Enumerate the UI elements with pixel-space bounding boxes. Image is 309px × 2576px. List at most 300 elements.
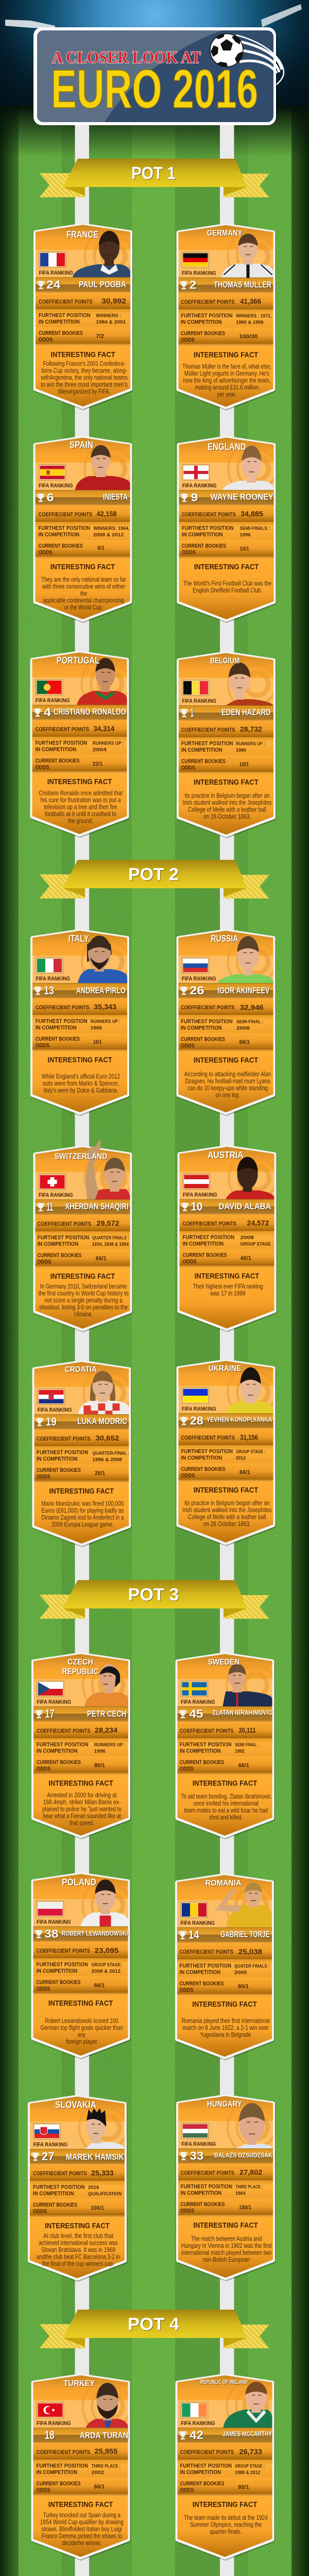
- FIFA ranking: 38: [44, 1927, 59, 1940]
- interesting fact: In Germany 2010, Switzerland became: [40, 1283, 127, 1290]
- interesting fact: [41, 1487, 124, 1528]
- interesting fact: INTERESTING FACT: [50, 563, 115, 571]
- player photo: Marek Hamsik: [85, 2108, 125, 2149]
- interesting fact: INTERESTING FACT: [48, 1779, 113, 1788]
- row: furthest position: 1964: [235, 2191, 246, 2196]
- row: bookies odds: CURRENT BOOKIES: [36, 2481, 80, 2487]
- FIFA ranking: 27: [42, 2150, 55, 2163]
- interesting fact: German top flight goals quicker than: [40, 2024, 123, 2031]
- row: bookies odds: ODDS: [35, 765, 49, 771]
- interesting fact: any: [78, 2031, 85, 2038]
- row: bookies odds: [181, 331, 258, 343]
- row: furthest position: RUNNERS UP :: [91, 1019, 121, 1025]
- country name: RUSSIA: [211, 934, 238, 944]
- interesting fact: decidethe winner.: [62, 2539, 101, 2547]
- row: coefficient points: COEFFIECIENT POINTS: [37, 1436, 90, 1442]
- row: furthest position: 2008 & 2012: [93, 532, 124, 538]
- player name: YEVHEN KONOPLYANKA: [207, 1416, 272, 1423]
- interesting fact: [40, 2500, 124, 2547]
- row: furthest position: 2016: [88, 2185, 99, 2191]
- row: bookies odds: CURRENT BOOKIES: [36, 1979, 80, 1986]
- country name: CZECH: [67, 1658, 93, 1667]
- flag: Germany: [182, 252, 209, 268]
- row: bookies odds: CURRENT BOOKIES: [181, 1037, 225, 1043]
- row: furthest position: FURTHEST POSITION: [181, 313, 233, 319]
- FIFA ranking: FIFA RANKING: [39, 483, 73, 489]
- row: coefficient points: COEFFIECIENT POINTS: [36, 2449, 90, 2455]
- row: bookies odds: 80/1: [238, 1984, 249, 1990]
- row: bookies odds: ODDS: [37, 1474, 50, 1480]
- panel: England: [177, 436, 286, 623]
- row: bookies odds: ODDS: [181, 337, 195, 343]
- panel: Sweden: [175, 1652, 284, 1839]
- player photo: Petr Cech: [84, 1664, 128, 1706]
- row: furthest position: 2008: [236, 1025, 250, 1031]
- player photo: Thomas Muller: [221, 234, 273, 277]
- player name: JAMES MCCARTHY: [222, 2430, 272, 2438]
- FIFA ranking: FIFA RANKING: [37, 2420, 71, 2427]
- posts: right sign post: [220, 124, 234, 2576]
- row: furthest position: IN COMPETITION: [37, 1748, 78, 1754]
- row: furthest position: GROUP STAGE :: [236, 1449, 266, 1455]
- interesting fact: making around £31.6 million: [195, 384, 259, 391]
- row: furthest position: 1992: [235, 1749, 245, 1754]
- row: coefficient points: 26,733: [239, 2448, 262, 2455]
- row: furthest position: [180, 1742, 259, 1754]
- interesting fact: [182, 778, 272, 820]
- row: furthest position: [35, 740, 124, 753]
- row: furthest position: FURTHEST POSITION: [39, 313, 91, 319]
- row: furthest position: [180, 2184, 263, 2196]
- row: coefficient points: [36, 2447, 118, 2455]
- row: furthest position: FURTHEST POSITION: [179, 1963, 231, 1969]
- row: bookies odds: 66/1: [94, 1982, 105, 1989]
- row: coefficient points: 32,946: [240, 1004, 264, 1011]
- row: bookies odds: [39, 330, 104, 343]
- interesting fact: straws. Blindfolded Italian boy Luigi: [42, 2526, 122, 2533]
- flag: Portugal: [36, 680, 63, 695]
- row: coefficient points: 29,572: [97, 1219, 119, 1227]
- row: furthest position: SEMI FINAL :: [235, 1742, 259, 1748]
- interesting fact: foreign player: [66, 2038, 97, 2045]
- player name: MAREK HAMSIK: [66, 2152, 125, 2162]
- FIFA ranking: FIFA RANKING: [33, 2142, 67, 2148]
- row: bookies odds: ODDS: [180, 2208, 195, 2214]
- interesting fact: shot and killed.: [209, 1814, 243, 1821]
- FIFA ranking: FIFA RANKING: [37, 1919, 71, 1925]
- row: bookies odds: ODDS: [37, 1766, 50, 1772]
- player name: BALÁZS DZSUDZSÁK: [214, 2151, 273, 2159]
- row: furthest position: [180, 2463, 265, 2476]
- row: coefficient points: COEFFIECIENT POINTS: [180, 2449, 234, 2455]
- row: bookies odds: 66/1: [96, 1256, 107, 1262]
- row: furthest position: IN COMPETITION: [33, 2191, 74, 2197]
- FIFA ranking: 33: [190, 2149, 203, 2162]
- interesting fact: or the World Cup.: [64, 604, 103, 611]
- row: bookies odds: [37, 1252, 107, 1265]
- row: bookies odds: ODDS: [182, 1259, 197, 1265]
- row: coefficient points: [182, 510, 264, 518]
- interesting fact: Its practice in Belgium began after an: [184, 1499, 270, 1506]
- FIFA ranking: [180, 976, 216, 997]
- row: furthest position: [37, 1235, 129, 1247]
- interesting fact: Arrested in 2000 for driving at: [47, 1792, 117, 1799]
- row: furthest position: THIRD PLACE :: [92, 2464, 121, 2469]
- player name: ANDREA PIRLO: [76, 986, 126, 995]
- row: bookies odds: CURRENT BOOKIES: [182, 1252, 227, 1258]
- flag: Slovakia: [33, 2124, 60, 2139]
- FIFA ranking: [34, 698, 70, 719]
- interesting fact: not score a single penalty during a: [45, 1297, 123, 1304]
- flag: England: [182, 465, 209, 480]
- row: coefficient points: 24,572: [247, 1219, 269, 1227]
- row: furthest position: RUNNERS UP :: [93, 741, 124, 747]
- row: coefficient points: 34,314: [94, 725, 115, 733]
- row: furthest position: FURTHEST POSITION: [37, 1742, 89, 1748]
- country name: FRANCE: [66, 230, 98, 240]
- player name: PETR CECH: [87, 1709, 127, 1719]
- row: furthest position: IN COMPETITION: [182, 1241, 224, 1247]
- country name: AUSTRIA: [208, 1150, 244, 1160]
- interesting fact: Robert Lewandowski scored 100: [45, 2018, 118, 2025]
- country name: SLOVAKIA: [55, 2100, 96, 2110]
- row: furthest position: QUALIFICATION: [88, 2191, 122, 2197]
- FIFA ranking: [37, 270, 73, 291]
- row: bookies odds: CURRENT BOOKIES: [37, 1467, 81, 1473]
- interesting fact: To aid team bonding, Zlatan Ibrahimovic: [181, 1793, 271, 1800]
- interesting fact: At club level, the first club that: [43, 2232, 113, 2240]
- row: coefficient points: 31,156: [240, 1433, 259, 1442]
- row: bookies odds: 10/1: [240, 546, 249, 552]
- interesting fact: on 26 October 1863.: [203, 813, 251, 820]
- row: furthest position: 1934, 1938 & 1954: [92, 1242, 129, 1247]
- row: coefficient points: [33, 2169, 114, 2177]
- row: furthest position: 1996 & 2008: [92, 1457, 122, 1463]
- row: coefficient points: COEFFIECIENT POINTS: [38, 512, 92, 518]
- row: furthest position: [179, 1963, 270, 1975]
- FIFA ranking: [34, 976, 70, 997]
- FIFA ranking: 26: [190, 984, 204, 997]
- interesting fact: INTERESTING FACT: [47, 1056, 112, 1064]
- row: coefficient points: 25,955: [95, 2447, 118, 2455]
- interesting fact: INTERESTING FACT: [48, 1999, 113, 2008]
- row: bookies odds: 80/1: [238, 2484, 249, 2490]
- row: furthest position: [181, 1449, 266, 1461]
- row: furthest position: QUARTER-FINAL :: [92, 1451, 129, 1456]
- row: furthest position: IN COMPETITION: [180, 1748, 221, 1754]
- row: furthest position: FURTHEST POSITION: [36, 1019, 88, 1025]
- interesting fact: [39, 1272, 129, 1318]
- player photo: David Alaba: [226, 1157, 274, 1199]
- interesting fact: per year.: [217, 391, 236, 398]
- title sign: [33, 27, 284, 125]
- country name: SWITZERLAND: [55, 1152, 108, 1161]
- interesting fact: [40, 1999, 123, 2045]
- interesting fact: INTERESTING FACT: [194, 350, 258, 360]
- FIFA ranking: [179, 1920, 215, 1941]
- interesting fact: [183, 563, 271, 594]
- row: furthest position: [36, 1019, 121, 1031]
- FIFA ranking: 24: [46, 278, 61, 291]
- row: furthest position: 2012: [236, 1455, 246, 1461]
- interesting fact: applicable continental championship: [43, 597, 125, 604]
- row: bookies odds: CURRENT BOOKIES: [182, 543, 226, 549]
- banner: Pot 1: POT 1: [131, 164, 176, 183]
- panel: France: [33, 223, 143, 410]
- row: coefficient points: COEFFIECIENT POINTS: [35, 726, 89, 733]
- player photo: Arda Turan: [85, 2383, 128, 2428]
- row: furthest position: IN COMPETITION: [181, 319, 222, 326]
- row: furthest position: 1980: [236, 748, 246, 753]
- FIFA ranking: [181, 1192, 217, 1213]
- interesting fact: INTERESTING FACT: [45, 2222, 110, 2230]
- row: furthest position: FURTHEST POSITION: [35, 740, 87, 747]
- row: bookies odds: [181, 1037, 250, 1049]
- row: bookies odds: ODDS: [180, 1766, 194, 1772]
- row: furthest position: IN COMPETITION: [38, 532, 79, 538]
- row: furthest position: [181, 313, 271, 326]
- flag: France: [39, 252, 66, 267]
- row: bookies odds: 66/1: [238, 1762, 249, 1769]
- banner: Pot 2: POT 2: [128, 865, 179, 884]
- row: coefficient points: COEFFIECIENT POINTS: [181, 727, 235, 733]
- player photo: Igor Akinfeev: [217, 936, 273, 983]
- row: furthest position: [39, 313, 126, 325]
- row: bookies odds: 150/1: [239, 2205, 251, 2211]
- row: coefficient points: [182, 1219, 269, 1227]
- interesting fact: Thomas Müller is the face of, what else,: [182, 363, 271, 370]
- interesting fact: the ground.: [68, 817, 93, 824]
- interesting fact: [184, 2500, 268, 2535]
- row: coefficient points: [38, 510, 117, 518]
- interesting fact: Italy's were by Dolce & Gabbana.: [43, 1087, 118, 1094]
- interesting fact: now the king of advertisingin the team,: [183, 377, 271, 384]
- interesting fact: [41, 563, 126, 611]
- row: bookies odds: CURRENT BOOKIES: [179, 1980, 224, 1987]
- row: furthest position: FURTHEST POSITION: [182, 526, 234, 532]
- FIFA ranking: [180, 483, 217, 504]
- panel: Spain: [33, 436, 142, 623]
- banner: Pot 2: [39, 860, 269, 899]
- row: coefficient points: [37, 1434, 119, 1442]
- row: furthest position: 1988 & 2012: [235, 2470, 260, 2476]
- player name: IGOR AKINFEEV: [217, 986, 270, 995]
- row: furthest position: [36, 2463, 121, 2476]
- row: furthest position: IN COMPETITION: [37, 1241, 78, 1247]
- country name: ENGLAND: [208, 442, 246, 452]
- row: coefficient points: COEFFIECIENT POINTS: [39, 299, 93, 305]
- row: bookies odds: 16/1: [93, 1039, 102, 1045]
- row: furthest position: FURTHEST POSITION: [181, 1449, 233, 1455]
- flag: Poland: [37, 1901, 64, 1917]
- interesting fact: College of Melle with a leather ball: [188, 806, 266, 813]
- row: furthest position: 1968: [91, 1025, 102, 1031]
- row: bookies odds: [37, 1759, 105, 1772]
- row: coefficient points: [36, 1003, 117, 1011]
- interesting fact: non-British European: [203, 2256, 250, 2263]
- panel: Italy: [30, 929, 140, 1116]
- heading: A closer look at: A CLOSER LOOK AT: [52, 48, 201, 67]
- row: coefficient points: 30,652: [95, 1434, 119, 1442]
- FIFA ranking: 17: [45, 1707, 55, 1720]
- icon: football: [210, 34, 243, 67]
- row: coefficient points: COEFFIECIENT POINTS: [36, 1948, 90, 1954]
- interesting fact: shootout, losing 3-0 on penalties to the: [39, 1303, 128, 1311]
- interesting fact: with three consecutive wins of either: [42, 583, 125, 590]
- row: coefficient points: 23,095: [95, 1946, 119, 1955]
- FIFA ranking: [37, 1192, 73, 1213]
- interesting fact: [182, 1486, 271, 1528]
- interesting fact: Slovan Bratislava. It was in 1969: [41, 2246, 115, 2253]
- row: furthest position: FURTHEST POSITION: [181, 1019, 233, 1025]
- interesting fact: Euros (£81,000) for playing badly as: [41, 1507, 124, 1514]
- row: bookies odds: ODDS: [36, 2487, 50, 2494]
- FIFA ranking: [37, 2420, 71, 2442]
- row: furthest position: IN COMPETITION: [180, 2190, 221, 2196]
- interesting fact: Yugoslavia in Belgrade: [200, 2031, 251, 2038]
- row: furthest position: [38, 526, 130, 538]
- interesting fact: [37, 2222, 120, 2267]
- interesting fact: INTERESTING FACT: [193, 1779, 257, 1788]
- banner: Pot 3: POT 3: [128, 1585, 179, 1604]
- player photo: Zlatan Ibrahimovic: [222, 1664, 272, 1706]
- row: coefficient points: COEFFIECIENT POINTS: [33, 2171, 87, 2177]
- row: bookies odds: 100/30: [239, 334, 258, 340]
- interesting fact: withArgentina, the only national teams: [41, 374, 128, 381]
- flag: Italy: [36, 958, 63, 973]
- interesting fact: [181, 1779, 271, 1821]
- interesting fact: 2009 Europa League game.: [52, 1521, 113, 1528]
- flag: Turkey: [37, 2402, 64, 2418]
- interesting fact: tions Cup victory, they became, along-: [41, 367, 127, 374]
- player name: LUKA MODRIC: [77, 1416, 127, 1426]
- row: furthest position: QUARTER FINALS :: [92, 1235, 129, 1241]
- country name: PORTUGAL: [57, 655, 99, 666]
- country name: REPUBLIC OF IRELAND: [200, 2379, 248, 2385]
- interesting fact: his cure for frustration was to put a: [41, 796, 121, 804]
- row: furthest position: [33, 2184, 122, 2197]
- interesting fact: team-mates to eat a wild boar he had: [184, 1807, 268, 1814]
- row: furthest position: GROUP STAGE: [240, 1242, 271, 1247]
- row: coefficient points: COEFFIECIENT POINTS: [37, 1221, 91, 1227]
- row: coefficient points: 35,343: [94, 1003, 117, 1011]
- row: bookies odds: CURRENT BOOKIES: [37, 1252, 81, 1259]
- FIFA ranking: 28: [190, 1414, 203, 1427]
- row: coefficient points: 25,038: [238, 1948, 263, 1956]
- player name: WAYNE ROONEY: [210, 492, 274, 502]
- player name: INIESTA: [103, 492, 128, 502]
- FIFA ranking: [179, 2420, 215, 2442]
- panel: Austria: [177, 1145, 286, 1332]
- panel: Republic of Ireland: [175, 2374, 284, 2561]
- FIFA ranking: 19: [46, 1415, 57, 1428]
- FIFA ranking: 13: [44, 984, 54, 997]
- interesting fact: Mario Mandzukic was fined 100,000: [41, 1500, 124, 1507]
- panel: Russia: [176, 929, 285, 1116]
- player name: CRISTIANO RONALDO: [54, 707, 126, 717]
- row: bookies odds: ODDS: [36, 1043, 49, 1049]
- row: furthest position: 1984 & 2001: [96, 319, 126, 325]
- panel: Romania: [175, 1873, 284, 2060]
- row: bookies odds: [181, 758, 249, 771]
- row: bookies odds: ODDS: [39, 337, 53, 343]
- row: furthest position: THIRD PLACE :: [235, 2184, 263, 2190]
- row: furthest position: [181, 1019, 264, 1031]
- interesting fact: achieved international success was: [39, 2239, 117, 2246]
- FIFA ranking: 2: [190, 278, 197, 292]
- interesting fact: on 26 October 1863.: [203, 1520, 251, 1528]
- row: coefficient points: [181, 1433, 259, 1442]
- row: furthest position: [36, 1962, 122, 1974]
- interesting fact: was 17 in 1999: [210, 1290, 246, 1297]
- interesting fact: They are the only national team so far: [41, 576, 126, 583]
- interesting fact: [42, 1056, 120, 1094]
- row: furthest position: WINNERS : 1972,: [236, 313, 271, 319]
- row: coefficient points: [181, 1004, 264, 1011]
- FIFA ranking: 6: [46, 491, 54, 504]
- row: coefficient points: COEFFIECIENT POINTS: [37, 1728, 91, 1734]
- row: furthest position: IN COMPETITION: [181, 1455, 222, 1461]
- row: furthest position: [182, 526, 270, 538]
- interesting fact: Ukraine.: [74, 1311, 93, 1318]
- row: coefficient points: 41,366: [240, 298, 262, 305]
- panel: Portugal: [30, 651, 139, 838]
- interesting fact: INTERESTING FACT: [49, 1487, 114, 1496]
- flag: Spain: [39, 465, 66, 480]
- row: furthest position: IN COMPETITION: [36, 2469, 77, 2476]
- row: furthest position: IN COMPETITION: [179, 1969, 220, 1975]
- country name: POLAND: [62, 1877, 96, 1888]
- flag: Croatia: [38, 1389, 64, 1404]
- row: furthest position: FURTHEST POSITION: [180, 1742, 232, 1748]
- row: furthest position: QUATER FINALS :: [234, 1963, 270, 1969]
- row: bookies odds: 66/1: [239, 1039, 250, 1045]
- interesting fact: Franco Gemma picked the straws to: [42, 2533, 122, 2540]
- FIFA ranking: FIFA RANKING: [181, 2420, 215, 2427]
- row: furthest position: FURTHEST POSITION: [180, 2184, 232, 2190]
- row: bookies odds: [36, 1036, 102, 1049]
- row: furthest position: IN COMPETITION: [37, 1456, 78, 1462]
- player name: PAUL POGBA: [79, 280, 126, 290]
- row: coefficient points: COEFFIECIENT POINTS: [180, 2170, 234, 2176]
- interesting fact: College of Melle with a leather ball: [188, 1514, 266, 1521]
- row: coefficient points: COEFFIECIENT POINTS: [180, 1728, 234, 1734]
- row: furthest position: SEMI-FINAL :: [236, 1019, 264, 1025]
- row: bookies odds: 6/1: [97, 545, 105, 551]
- row: furthest position: FURTHEST POSITION: [181, 741, 233, 747]
- FIFA ranking: 4: [44, 706, 52, 719]
- interesting fact: the final of the cup winners cup.: [42, 2260, 114, 2267]
- row: bookies odds: CURRENT BOOKIES: [35, 758, 79, 764]
- country name: SPAIN: [70, 440, 93, 450]
- country name line 2: REPUBLIC: [62, 1667, 99, 1676]
- row: bookies odds: CURRENT BOOKIES: [33, 2202, 77, 2208]
- flag: Czech Republic: [37, 1681, 64, 1697]
- FIFA ranking: 18: [44, 2429, 55, 2442]
- player photo: Andrea Pirlo: [78, 936, 127, 983]
- interesting fact: quarter-finals.: [210, 2528, 242, 2535]
- flag: Romania: [181, 1902, 208, 1918]
- FIFA ranking: 10: [191, 1200, 203, 1213]
- FIFA ranking: [35, 1919, 71, 1940]
- row: bookies odds: 25/1: [95, 1470, 105, 1477]
- row: furthest position: RUNNERS UP :: [236, 741, 265, 747]
- FIFA ranking: FIFA RANKING: [182, 483, 217, 489]
- FIFA ranking: FIFA RANKING: [182, 976, 216, 982]
- row: coefficient points: 27,802: [239, 2168, 262, 2176]
- row: coefficient points: 30,992: [101, 297, 126, 305]
- row: bookies odds: [35, 758, 102, 771]
